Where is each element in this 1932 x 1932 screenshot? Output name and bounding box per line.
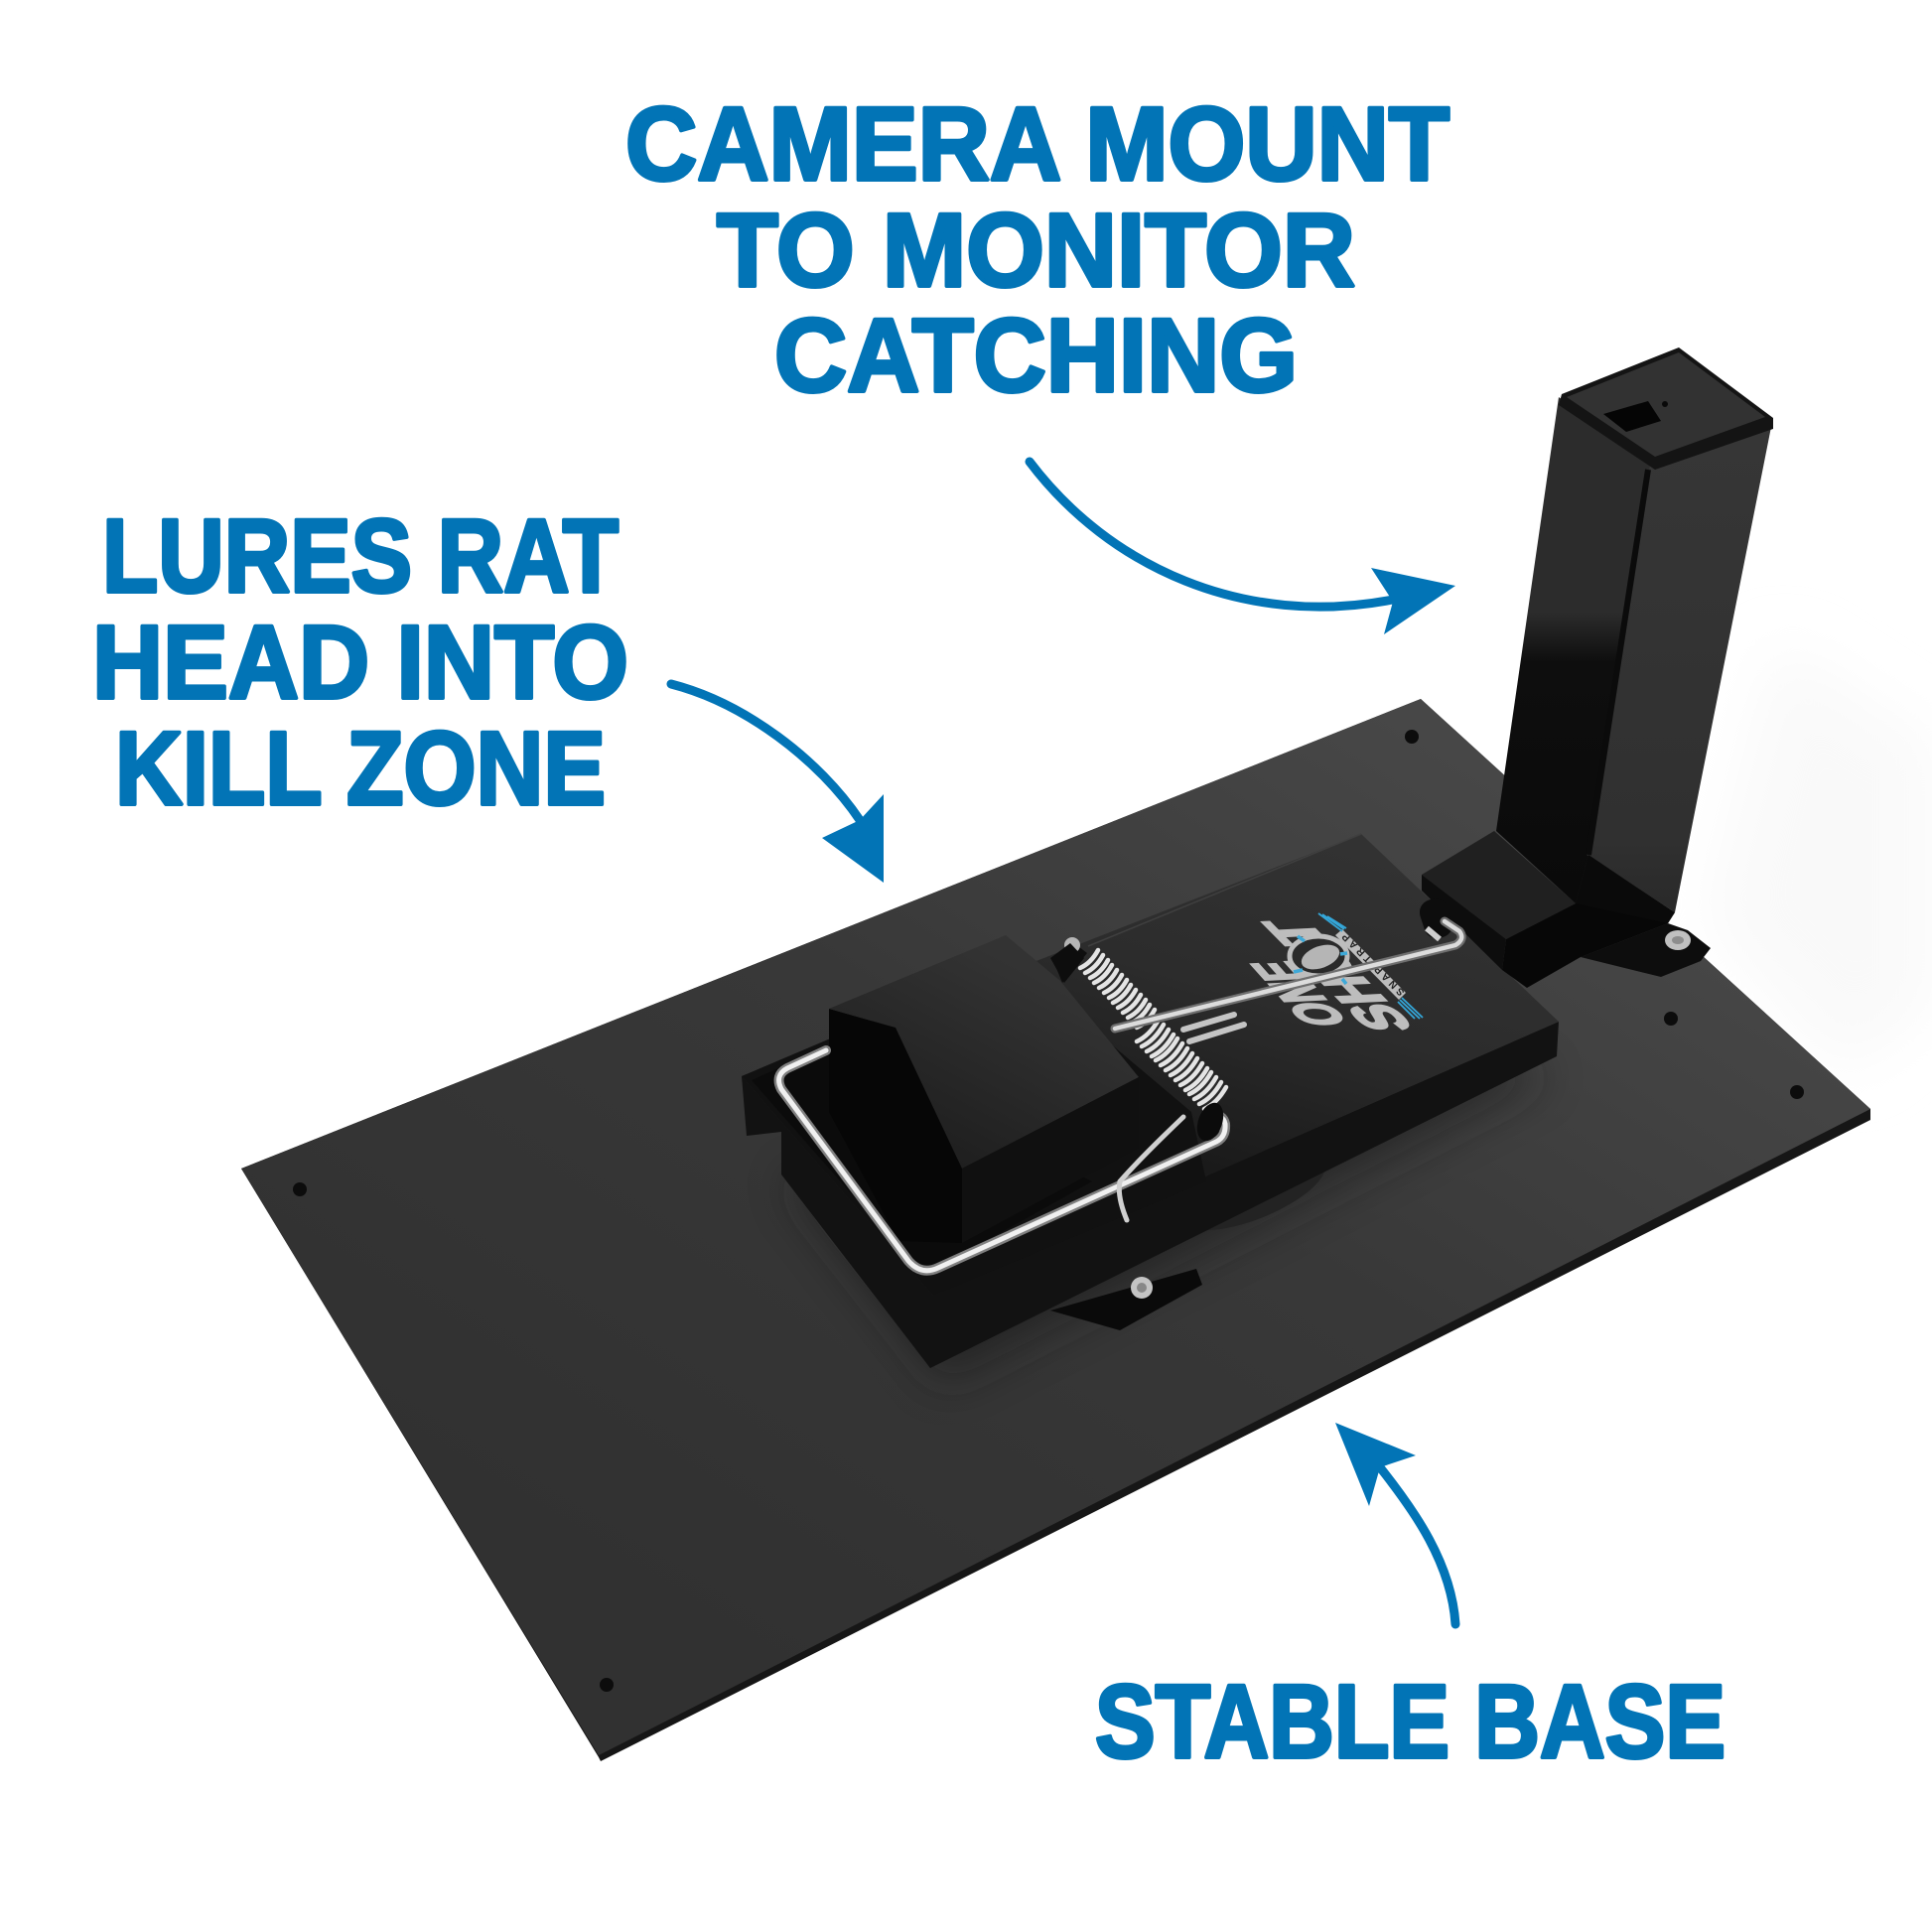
cover tunnel xyxy=(829,935,1139,1243)
arrow: to base xyxy=(1335,1423,1455,1624)
soft shadow on the backdrop xyxy=(1708,645,1932,1072)
heading: camera mount: CATCHING xyxy=(774,298,1298,414)
heading: camera mount: TO MONITOR xyxy=(717,193,1355,309)
logo: SHOT xyxy=(1248,919,1429,1033)
springs xyxy=(1050,937,1228,1145)
heading: camera mount xyxy=(625,86,1449,414)
arrow: to camera mount xyxy=(1030,462,1455,634)
heading: lures rat xyxy=(92,498,628,827)
heading: lures rat: KILL ZONE xyxy=(115,711,606,827)
heading: lures rat: LURES RAT xyxy=(102,498,619,615)
camera post xyxy=(1496,347,1773,923)
trigger wire xyxy=(1119,1117,1183,1220)
heading: stable base: STABLE BASE xyxy=(1095,1664,1725,1780)
long striker wire xyxy=(1115,921,1461,1029)
disc under trap xyxy=(1171,1137,1335,1246)
knob xyxy=(1417,896,1455,942)
product: trap on base xyxy=(241,347,1870,1761)
trap prongs xyxy=(1183,1015,1244,1041)
arrow: to kill zone xyxy=(671,684,884,883)
post foot and bracket xyxy=(1422,831,1711,988)
trap block xyxy=(742,834,1559,1368)
logo: SNAP TRAP xyxy=(1340,930,1407,998)
kill bar wire xyxy=(779,1050,1225,1271)
base plate xyxy=(241,699,1870,1761)
shadow under trap xyxy=(784,1052,1549,1385)
heading: camera mount: CAMERA MOUNT xyxy=(625,86,1449,203)
heading: lures rat: HEAD INTO xyxy=(92,605,628,721)
logo: ONE xyxy=(1237,960,1361,1028)
front bracket xyxy=(1050,1269,1202,1330)
post cap xyxy=(1559,347,1773,470)
